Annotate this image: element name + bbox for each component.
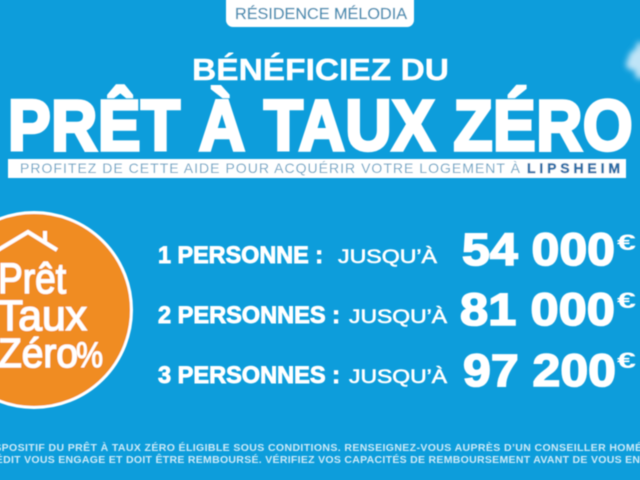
badge text: Zéro: [0, 330, 78, 376]
row: 3 personnes: [158, 345, 636, 396]
badge: prêt taux zéro: [0, 212, 132, 408]
residence name badge: [226, 0, 414, 27]
row: 1 personne: 54 000: [462, 224, 615, 275]
row: 2 personnes: €: [617, 288, 636, 313]
subtitle strip: LIPSHEIM: [527, 160, 620, 176]
row: 2 personnes: JUSQU’À: [349, 307, 447, 328]
subtitle strip: [8, 159, 626, 178]
row: 3 personnes: 3 PERSONNES :: [158, 362, 340, 389]
row: 1 personne: 1 PERSONNE :: [158, 242, 323, 269]
row: 1 personne: [158, 224, 636, 275]
title: prêt à taux zéro: PRÊT À TAUX ZÉRO: [8, 87, 633, 166]
subtitle strip: PROFITEZ DE CETTE AIDE POUR ACQUÉRIR VOTRE LOGEMENT À: [20, 160, 521, 176]
row: 3 personnes: 97 200: [463, 345, 616, 396]
badge text: [0, 255, 103, 376]
badge text: %: [76, 336, 103, 375]
row: 2 personnes: [158, 284, 636, 335]
cloud at right edge: [626, 42, 640, 79]
legal disclaimer: [0, 441, 640, 466]
row: 1 personne: JUSQU’À: [338, 247, 437, 268]
icon: house roof: [0, 231, 57, 250]
row: 3 personnes: €: [617, 348, 636, 373]
badge text: Prêt: [0, 255, 66, 303]
heading: benefit line: BÉNÉFICIEZ DU: [192, 52, 449, 87]
row: 3 personnes: JUSQU’À: [349, 367, 447, 388]
residence name badge: RÉSIDENCE MÉLODIA: [235, 4, 407, 23]
row: 2 personnes: 81 000: [460, 284, 615, 335]
legal disclaimer: DISPOSITIF DU PRÊT À TAUX ZÉRO ÉLIGIBLE SOUS CONDITIONS. RENSEIGNEZ-VOUS AUPRÈS D’UN CONSEILLER HOMÉ: [0, 441, 640, 454]
row: 2 personnes: 2 PERSONNES :: [158, 302, 340, 329]
row: 1 personne: €: [617, 230, 636, 255]
